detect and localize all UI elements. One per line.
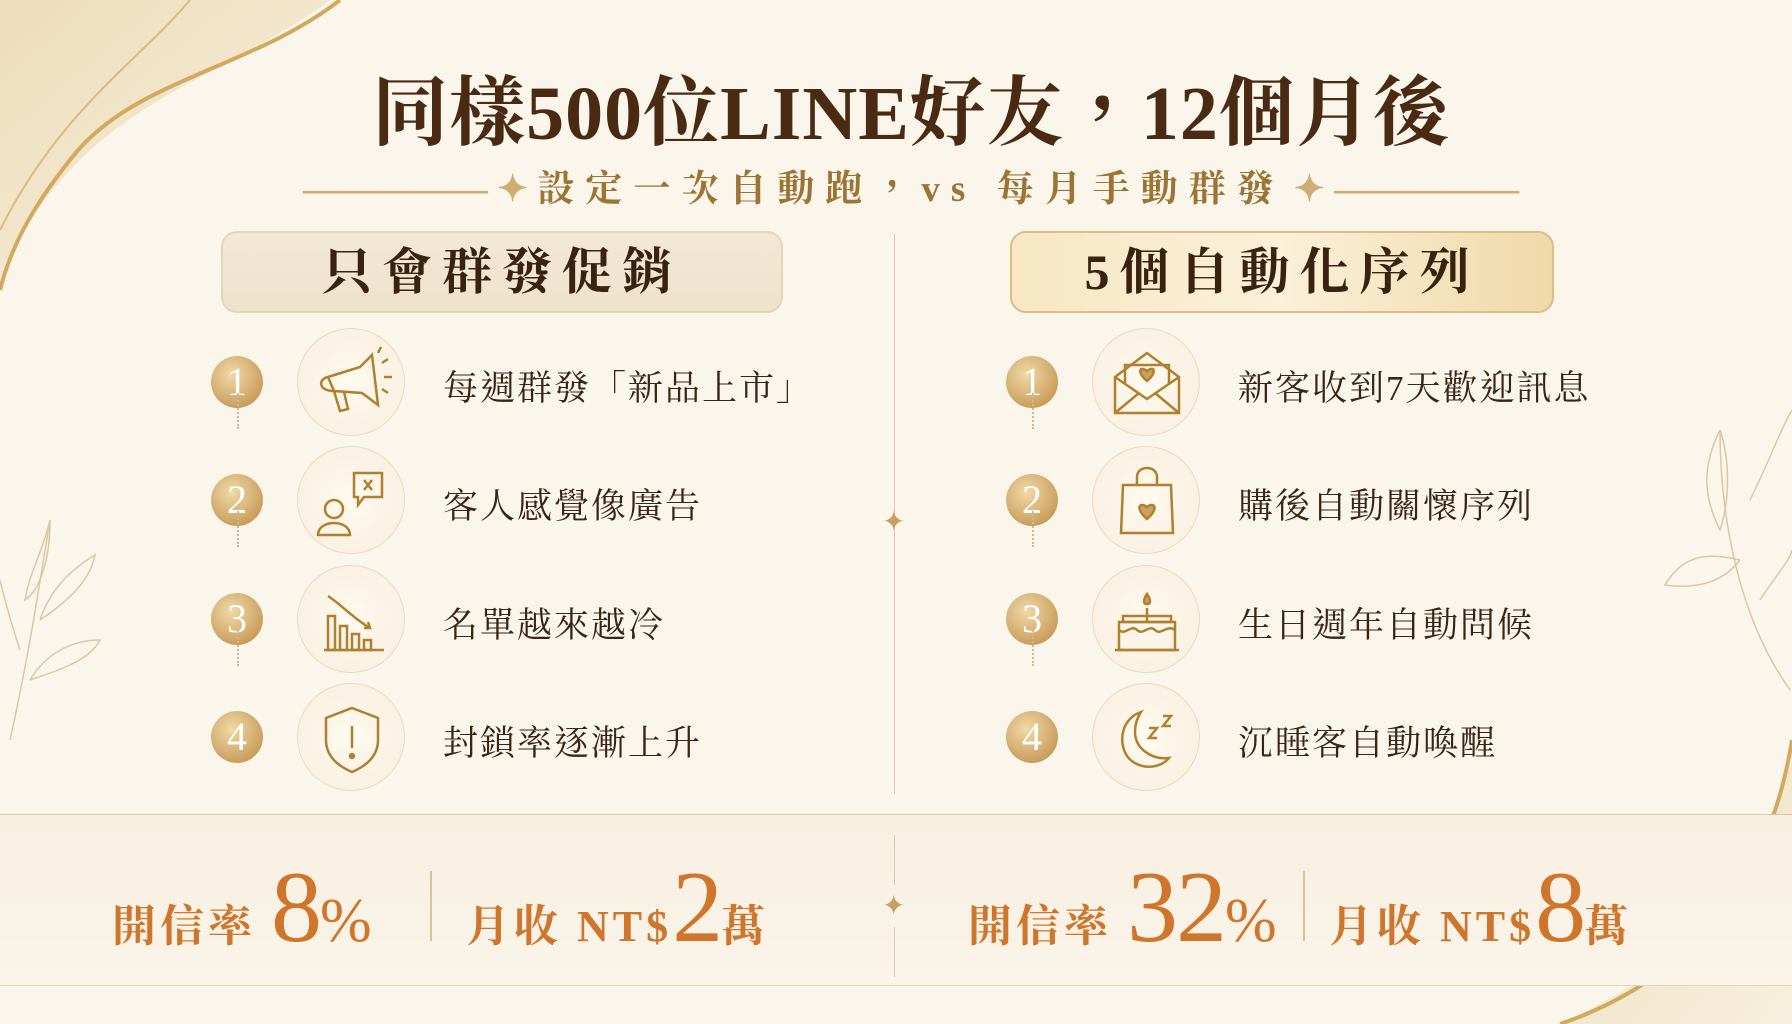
row 1 [1006,328,1591,436]
stat: left open rate: 開信率 8% [112,851,372,964]
row 4 [1006,683,1497,791]
header: left: 只會群發促銷 [322,244,682,300]
row 2: 客人感覺像廣告 [443,487,702,526]
row 3: 3 [1022,596,1042,641]
stat: left revenue: 月收 NT$2萬 [466,851,769,964]
header: right: 5個自動化序列 [1084,244,1480,300]
row 4: 4 [1022,714,1042,759]
row 2: 購後自動關懷序列 [1238,487,1534,526]
center star: ✦ [882,507,905,538]
header: left [221,231,783,313]
stat: right open rate: 開信率 32% [968,851,1277,964]
row 4: 封鎖率逐漸上升 [443,724,702,763]
subtitle: ————— ✦ 設定一次自動跑，vs 每月手動群發 ✦ ————— [303,169,1519,210]
row 2 [211,446,702,554]
center star bottom: ✦ [882,891,905,922]
row 2: 2 [1022,477,1042,522]
row 1: 每週群發「新品上市」 [443,369,813,408]
row 3: 名單越來越冷 [443,606,665,645]
row 1: 新客收到7天歡迎訊息 [1238,369,1591,408]
panel: left list [211,328,813,791]
row 3 [211,565,665,673]
row 1: 1 [1022,359,1042,404]
row 2 [1006,446,1534,554]
center divider [894,234,895,794]
bottom stats band [0,814,1792,986]
row 3: 3 [227,596,247,641]
panel: right list [1006,328,1591,791]
row 4: 沉睡客自動喚醒 [1238,724,1497,763]
row 3: 生日週年自動問候 [1238,606,1534,645]
row 2: 2 [227,477,247,522]
row 1: 1 [227,359,247,404]
row 4 [211,683,702,791]
row 1 [211,328,813,436]
title: 同樣500位LINE好友，12個月後 [372,72,1450,156]
header: right [1010,231,1554,313]
row 3 [1006,565,1534,673]
row 4: 4 [227,714,247,759]
stat: right revenue: 月收 NT$8萬 [1329,851,1632,964]
